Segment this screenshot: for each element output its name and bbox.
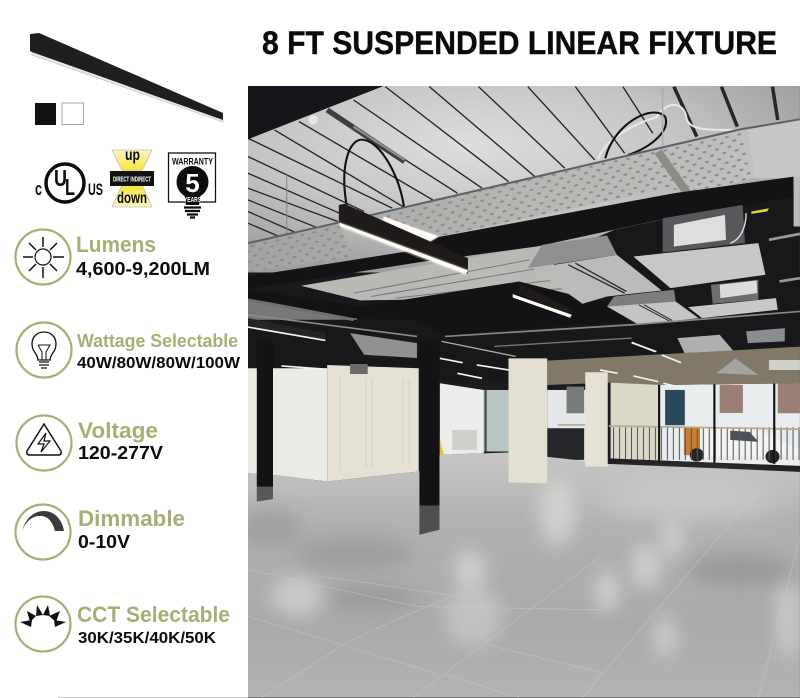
floor (248, 453, 800, 698)
spec: wattage: Wattage Selectable (77, 331, 238, 351)
railing (609, 427, 800, 460)
spec: dimmable (16, 504, 185, 560)
spec: voltage: Voltage (78, 418, 158, 443)
icon: 5 year warranty: WARRANTY (172, 156, 213, 166)
middle back wall and glass (440, 383, 484, 455)
spec: lumens: Lumens (76, 232, 156, 257)
columns (256, 368, 273, 487)
spec: lumens (16, 230, 210, 284)
spec: CCT: 30K/35K/40K/50K (78, 630, 217, 647)
icon: direct indirect up down: up (125, 147, 140, 164)
icon: UL certification: c (35, 179, 42, 199)
room: walls, columns, windows and floor (237, 340, 800, 698)
main beam (248, 177, 794, 289)
dark service void (554, 190, 800, 272)
street window (660, 383, 800, 466)
icon: UL certification: L (65, 174, 75, 200)
title: 8 FT SUSPENDED LINEAR FIXTURE (262, 25, 777, 61)
icon: light bulb (16, 322, 72, 378)
photo: office interior with suspended fixtures (237, 86, 800, 698)
icon: half sun rays (16, 596, 70, 652)
icon: 5 year warranty: 5 (185, 168, 200, 198)
fixture: second pendant (513, 283, 572, 318)
cable tray (248, 127, 760, 272)
spec: voltage (16, 416, 163, 470)
icon: 5 year warranty: YEARS (184, 197, 201, 204)
spec: lumens: 4,600-9,200LM (76, 259, 210, 279)
second beam (250, 282, 618, 320)
lower pendant lights and beams (445, 311, 800, 336)
icon: direct indirect up down: down (117, 190, 147, 207)
spec: wattage: 40W/80W/80W/100W (77, 355, 240, 372)
ducts (663, 205, 745, 252)
spec: dimmable: Dimmable (78, 506, 185, 531)
finish colour swatches (35, 103, 84, 125)
ceiling, beams and fixtures (248, 86, 800, 380)
floor tile joints (248, 487, 800, 698)
icon: sun (16, 230, 70, 284)
spec: voltage: 120-277V (78, 443, 163, 463)
icon: direct indirect up down (110, 147, 154, 207)
spec: CCT (16, 596, 230, 652)
spec: dimmable: 0-10V (78, 532, 130, 552)
spec: wattage (16, 322, 240, 378)
van (683, 428, 800, 457)
right wall section (611, 383, 659, 461)
lower ceiling bay (301, 246, 577, 300)
icon: dimmer arc (16, 504, 70, 560)
icon: direct indirect up down: DIRECT INDIRECT (113, 176, 151, 184)
icon: UL certification (35, 164, 103, 202)
icon: triangle with bolt (16, 416, 72, 470)
floor reflections (237, 480, 800, 660)
ceiling warm soffit (547, 347, 800, 385)
icon: 5 year warranty (168, 153, 216, 218)
product image: linear fixture (30, 33, 223, 122)
icon: UL certification: U (54, 165, 67, 191)
icon: UL certification: US (88, 181, 103, 199)
back wall left (248, 368, 327, 482)
fixture: main pendant (339, 140, 468, 274)
spec: CCT: CCT Selectable (77, 602, 230, 627)
